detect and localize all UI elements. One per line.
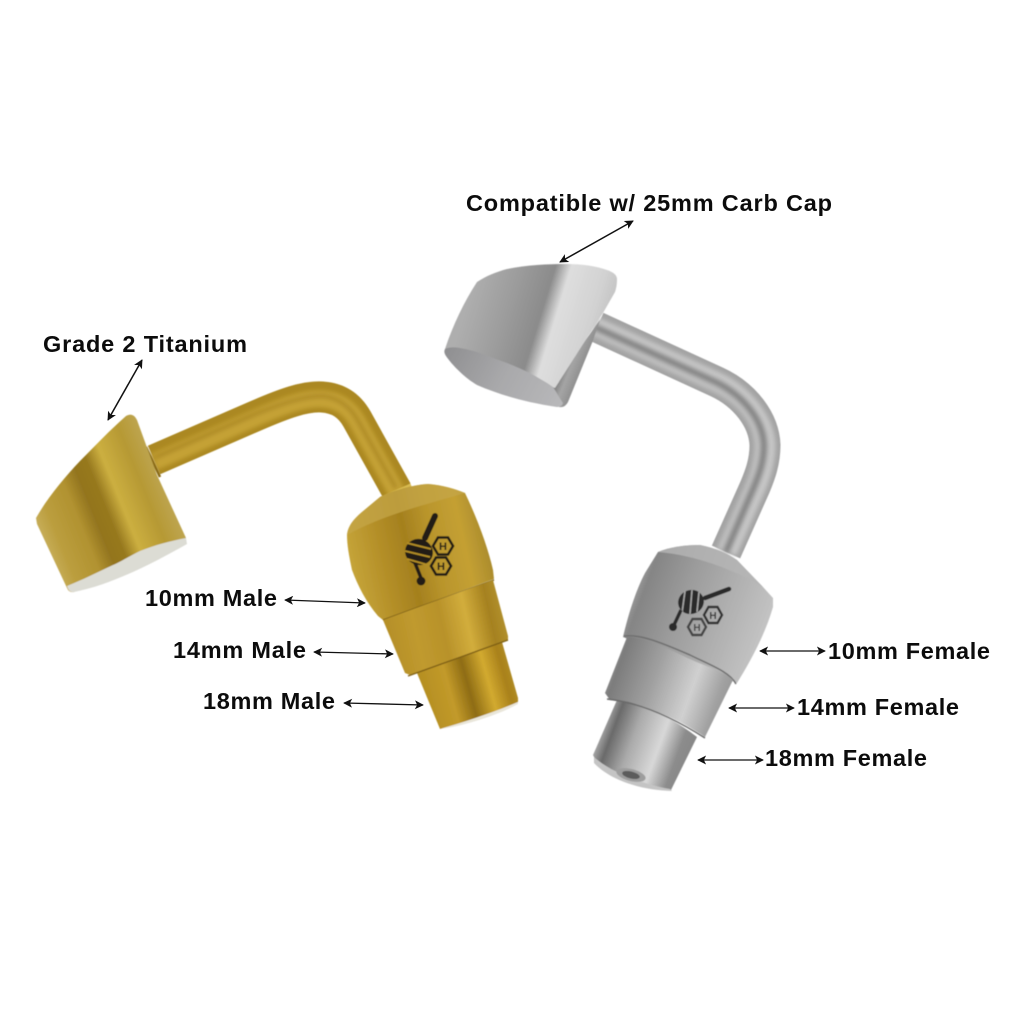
silver nail: top body section <box>623 545 773 684</box>
gold nail: bottom step <box>408 640 518 729</box>
label: Compatible with 25mm carb cap with arrow <box>466 190 832 262</box>
silver titanium nail <box>444 264 773 791</box>
icon: gold nail honey dipper logo: H <box>439 541 447 553</box>
silver nail: angled bucket <box>444 264 617 407</box>
icon: silver nail honey dipper logo <box>669 586 729 635</box>
label: 14mm Female with arrow: 14mm Female <box>797 694 959 720</box>
icon: silver nail honey dipper logo: H <box>709 611 717 622</box>
gold nail: angled bucket <box>36 415 187 592</box>
label: 10mm Male with arrow: 10mm Male <box>145 585 277 611</box>
label: 14mm Male with arrow: 14mm Male <box>173 637 306 663</box>
gold nail: middle step <box>383 580 508 675</box>
label: Grade 2 Titanium with arrow: Grade 2 Titanium <box>43 331 247 357</box>
gold titanium nail <box>36 396 518 729</box>
label: 18mm Male with arrow: 18mm Male <box>203 688 335 714</box>
label: 10mm Male with arrow <box>145 585 365 611</box>
label: Compatible with 25mm carb cap with arrow: Compatible w/ 25mm Carb Cap <box>466 190 832 216</box>
icon: gold nail honey dipper logo <box>402 516 453 585</box>
label: 10mm Female with arrow: 10mm Female <box>828 638 990 664</box>
label: Grade 2 Titanium with arrow <box>43 331 247 420</box>
icon: gold nail honey dipper logo: H <box>437 561 445 573</box>
gold nail: bent tube <box>146 396 411 498</box>
gold nail: top body section <box>347 484 494 620</box>
silver nail: bottom step <box>593 699 705 791</box>
icon: silver nail honey dipper logo: H <box>693 623 701 634</box>
label: 18mm Female with arrow: 18mm Female <box>765 745 927 771</box>
silver nail: bent tube <box>593 322 771 554</box>
silver nail: middle step <box>605 637 733 737</box>
